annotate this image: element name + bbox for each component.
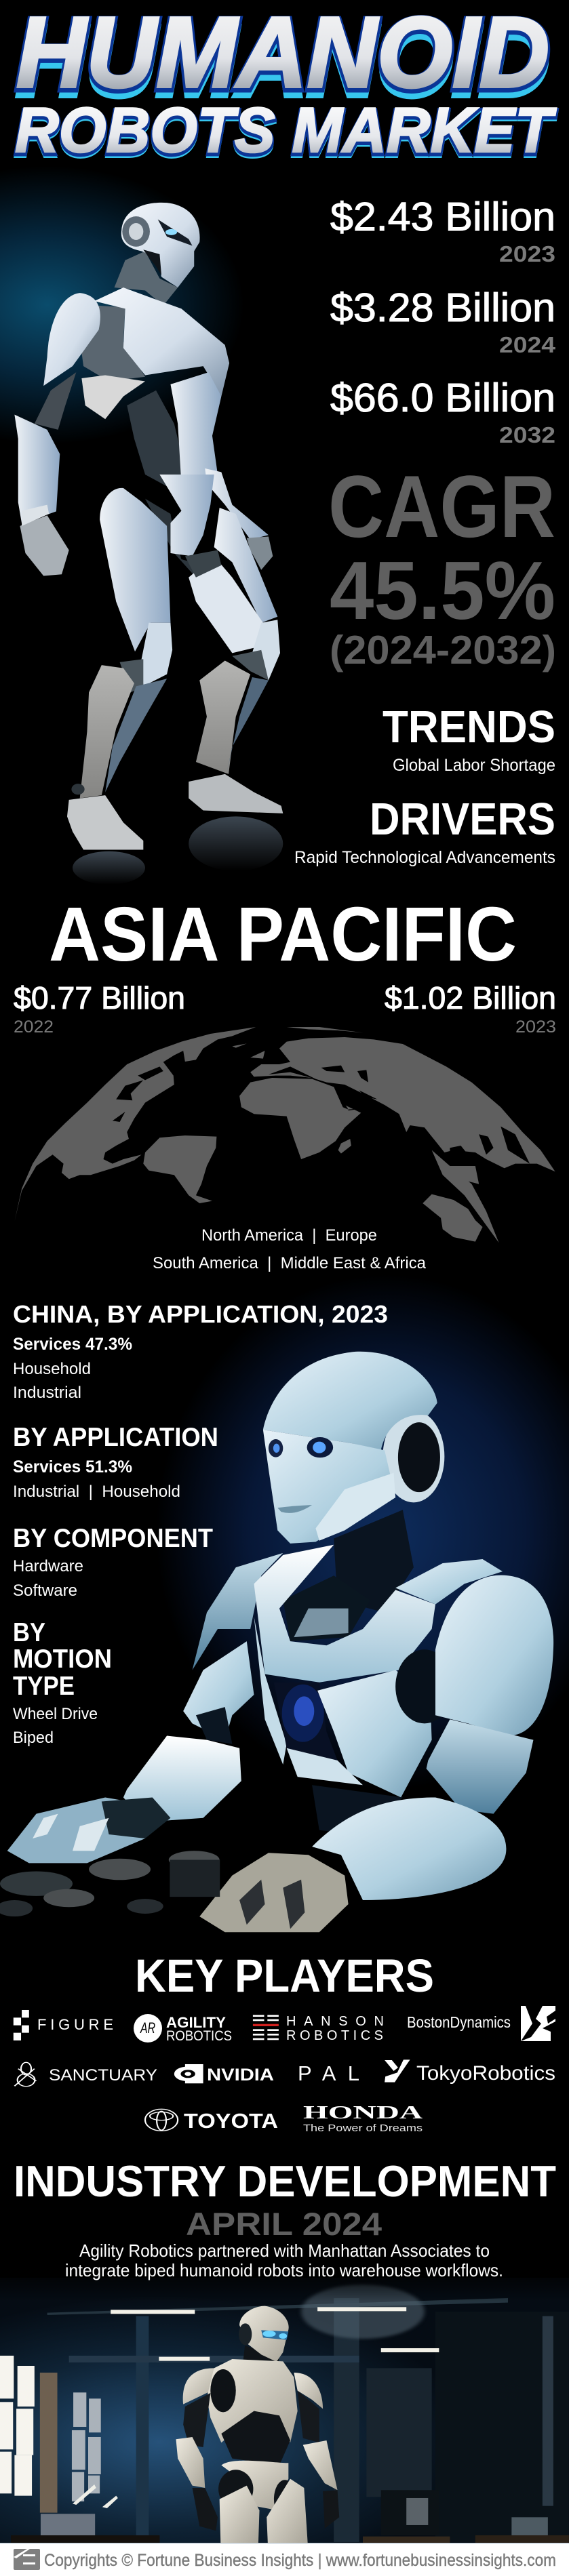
segmentation: by application: Industrial | Household (13, 1483, 180, 1501)
segmentation: by application (13, 1423, 218, 1501)
logo: Nvidia: NVIDIA (207, 2066, 274, 2085)
logo: Tokyo Robotics (385, 2059, 555, 2085)
logo: Hanson Robotics: ROBOTICS (286, 2028, 383, 2043)
logo: Nvidia (174, 2064, 274, 2085)
stat: 2023: $2.43 Billion (330, 195, 555, 239)
stat: 2032: $66.0 Billion (330, 376, 555, 420)
segmentation: by motion type (13, 1618, 112, 1747)
regional value 2023 (385, 980, 556, 1037)
robot illustration: seated humanoid with coins (0, 1352, 553, 1932)
logo: Hanson Robotics: HANSON (286, 2014, 384, 2029)
stat: 2032: 2032 (499, 422, 555, 447)
logo: Boston Dynamics (407, 2006, 555, 2041)
segmentation: China by application: Household (13, 1360, 91, 1378)
regional value 2022: 2022 (14, 1018, 54, 1037)
logo: Honda: HONDA (303, 2102, 423, 2122)
logo: Hanson Robotics (253, 2014, 384, 2043)
logo: Toyota: TOYOTA (184, 2109, 278, 2133)
regional value 2023: $1.02 Billion (385, 980, 556, 1015)
footer bar (0, 2543, 569, 2576)
drivers (294, 794, 555, 867)
CAGR block: (2024-2032) (330, 628, 556, 672)
title: HUMANOID (16, 5, 549, 117)
logo: Honda (303, 2102, 423, 2134)
logo: Honda: The Power of Dreams (303, 2122, 423, 2134)
regional value 2022: $0.77 Billion (14, 980, 185, 1015)
heading: Asia Pacific: ASIA PACIFIC (49, 891, 517, 977)
date: April 2024: APRIL 2024 (186, 2206, 382, 2242)
segmentation: by component: Hardware (13, 1557, 83, 1575)
logo: Figure (14, 2010, 113, 2040)
stat: 2023: 2023 (499, 241, 555, 266)
title: ROBOTS MARKET (15, 98, 557, 169)
logo: Figure: FIGURE (37, 2016, 113, 2033)
body text: industry development: Agility Robotics partnered with Manhattan Associates to (79, 2240, 490, 2261)
title: HUMANOID (16, 0, 549, 110)
regional value 2022 (14, 980, 185, 1037)
other regions list: North America | Europe (201, 1226, 377, 1245)
title: ROBOTS MARKET (15, 94, 557, 165)
logo: Sanctuary: SANCTUARY (49, 2066, 157, 2085)
CAGR block: 45.5% (330, 544, 555, 637)
factory photo scene (0, 2268, 569, 2543)
logo: Agility Robotics: AR (140, 2019, 155, 2036)
heading: industry development: INDUSTRY DEVELOPMENT (14, 2156, 556, 2206)
segmentation: by motion type: Biped (13, 1729, 54, 1747)
segmentation: China by application: CHINA, BY APPLICATION, 2023 (13, 1300, 388, 1328)
trends (382, 702, 555, 775)
title (15, 0, 557, 169)
icon: Fortune Business Insights logo (14, 2549, 40, 2570)
segmentation: by component: Software (13, 1582, 77, 1600)
logo: Toyota (145, 2109, 278, 2133)
segmentation: by application: Services 51.3% (13, 1457, 132, 1476)
CAGR block (328, 457, 556, 672)
logo: Sanctuary (14, 2062, 157, 2087)
logo: Boston Dynamics: BostonDynamics (407, 2013, 511, 2031)
body text: industry development: integrate biped humanoid robots into warehouse workflows. (65, 2260, 503, 2280)
trends: TRENDS (382, 702, 555, 752)
hero robot glow (0, 166, 244, 444)
segmentation: by motion type: TYPE (13, 1672, 75, 1701)
stat: 2023 (330, 195, 555, 266)
other regions list (153, 1226, 427, 1272)
segmentation: by component: BY COMPONENT (13, 1524, 213, 1553)
heading: key players: KEY PLAYERS (135, 1950, 434, 2002)
logo: Agility Robotics: AGILITY (166, 2014, 226, 2031)
logo: Tokyo Robotics: TokyoRobotics (416, 2062, 555, 2085)
segmentation: by motion type: Wheel Drive (13, 1705, 98, 1723)
stat: 2032 (330, 376, 555, 447)
trends: Global Labor Shortage (393, 756, 555, 775)
logo: Agility Robotics: ROBOTICS (166, 2028, 232, 2044)
robot illustration: standing humanoid (14, 203, 283, 885)
market size stats (330, 195, 556, 447)
stat: 2024 (330, 285, 556, 357)
segmentation: by component (13, 1524, 213, 1600)
segmentation: China by application (13, 1300, 388, 1402)
world globe map (14, 1027, 555, 1243)
logo: PAL: PAL (298, 2061, 359, 2085)
title: ROBOTS MARKET (15, 96, 557, 167)
stat: 2024: 2024 (499, 332, 556, 357)
stat: 2024: $3.28 Billion (330, 285, 555, 330)
segmentation: China by application: Industrial (13, 1384, 81, 1402)
drivers: DRIVERS (370, 794, 555, 845)
segmentation: by motion type: MOTION (13, 1645, 112, 1674)
drivers: Rapid Technological Advancements (294, 848, 555, 867)
robot glow background (156, 1274, 569, 1790)
segmentation: by motion type: BY (13, 1618, 45, 1647)
segmentation: China by application: Services 47.3% (13, 1335, 132, 1354)
body text: industry development (65, 2240, 503, 2280)
segmentation: by application: BY APPLICATION (13, 1423, 218, 1452)
logo: Agility Robotics (134, 2014, 232, 2044)
regional value 2023: 2023 (515, 1018, 556, 1037)
other regions list: South America | Middle East & Africa (153, 1254, 427, 1272)
